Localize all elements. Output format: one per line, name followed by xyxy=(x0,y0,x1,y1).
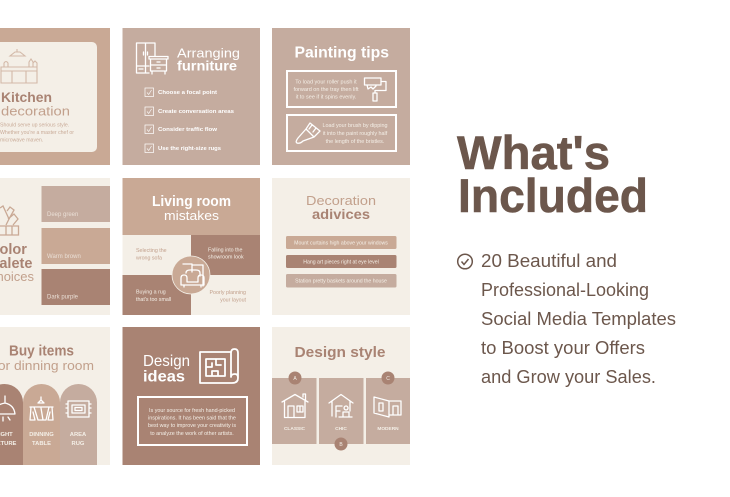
arch: light fixture xyxy=(0,384,23,465)
tip box: brush: Load your brush by dipping xyxy=(322,123,388,129)
heading: Decoration: Decoration xyxy=(306,193,376,208)
advice bar 1: Mount curtains high above your windows xyxy=(294,240,388,246)
advice bar 3: Station pretty baskets around the house xyxy=(295,278,387,284)
text box: design ideas: inspirations. It has been said that the xyxy=(148,416,236,422)
heading: furniture: furniture xyxy=(177,58,238,74)
checklist xyxy=(145,88,234,152)
tip box: roller: forward on the tray then lift xyxy=(293,87,359,93)
icon: wardrobe and nightstand xyxy=(136,43,168,74)
panel: buy items for dinning room xyxy=(0,327,110,465)
title: What's Included: What's xyxy=(457,126,610,179)
swatch: deep green: Deep green xyxy=(47,212,78,218)
panel: color palette choices xyxy=(0,178,110,315)
swatch: warm brown: Warm brown xyxy=(47,254,81,260)
tip box: brush: the length of the bristles. xyxy=(326,139,384,145)
arch: dinning table: DINNING xyxy=(29,432,54,438)
text block: description: to Boost your Offers xyxy=(481,338,645,358)
text box: design ideas: Is your source for fresh hand-picked xyxy=(149,408,235,414)
column: classic xyxy=(272,372,316,444)
arch: dinning table xyxy=(23,384,60,465)
icon: paint roller xyxy=(364,78,386,101)
checklist item 3: Consider traffic flow xyxy=(158,127,218,133)
mistake labels: Poorly planning xyxy=(209,290,246,296)
icon: colour swatch fan xyxy=(0,206,18,235)
heading: decoration: decoration xyxy=(1,104,70,118)
heading: Design style: Design style xyxy=(294,344,386,361)
panel: design style xyxy=(272,327,410,465)
heading: Arranging: Arranging xyxy=(177,46,240,60)
icon: armchair in circle xyxy=(172,256,210,294)
body text: kitchen: Should serve up serious style. xyxy=(0,122,69,128)
text box: design ideas: best way to improve your creativity is xyxy=(148,423,236,429)
arch: area rug: AREA xyxy=(70,432,87,438)
checklist item 1: Choose a focal point xyxy=(158,90,217,96)
swatch: dark purple: Dark purple xyxy=(47,294,79,300)
tip box: brush xyxy=(287,115,396,151)
text block: description: and Grow your Sales. xyxy=(481,367,656,387)
column: classic: A xyxy=(293,376,297,382)
mistake labels: Buying a rug xyxy=(136,290,166,296)
panel: arranging furniture xyxy=(122,28,260,165)
panel: kitchen decoration xyxy=(0,28,110,165)
icon: paint brush xyxy=(296,123,320,143)
panel: living room mistakes xyxy=(122,178,260,315)
checklist item 4: Use the right-size rugs xyxy=(158,146,221,152)
panel: painting tips xyxy=(272,28,410,165)
text box: design ideas: to analyze the work of other artists. xyxy=(150,431,234,437)
body text: kitchen: Whether you're a master chef or xyxy=(0,130,74,136)
heading: Painting tips: Painting tips xyxy=(294,44,389,62)
title: What's Included xyxy=(457,126,648,222)
mistake labels: Selecting the xyxy=(136,248,167,254)
text block: description: Professional-Looking xyxy=(481,280,649,300)
title: What's Included: Included xyxy=(458,169,648,222)
heading: adivices: adivices xyxy=(312,206,370,222)
text block: description: 20 Beautiful and xyxy=(481,251,617,271)
icon: floor plan blueprint xyxy=(200,349,238,383)
tip box: roller xyxy=(287,71,396,107)
icon: kitchen xyxy=(1,49,37,83)
icon: check circle xyxy=(458,254,472,269)
body text: kitchen: microwave maven. xyxy=(0,138,43,144)
panel: decoration advices xyxy=(272,178,410,315)
tip box: roller: it to see if it spins evenly. xyxy=(296,94,357,100)
mistake labels: showroom look xyxy=(208,254,244,260)
column: classic: CLASSIC xyxy=(284,426,306,432)
advice bar 2: Hang art pieces right at eye level xyxy=(303,260,379,266)
arch: area rug: RUG xyxy=(72,441,85,447)
column: modern: MODERN xyxy=(377,426,399,432)
mistake labels: that's too small xyxy=(136,297,171,303)
mistake labels: your layout xyxy=(220,298,247,304)
column: chic: CHIC xyxy=(335,426,347,432)
column: modern xyxy=(366,372,410,444)
heading: Living room: Living room xyxy=(152,194,231,210)
heading: Buy items: Buy items xyxy=(9,344,74,360)
heading: Design: Design xyxy=(143,353,190,370)
tip box: brush: it into the paint roughly half xyxy=(323,131,388,137)
text box: design ideas xyxy=(138,397,247,445)
arch: area rug xyxy=(60,384,97,465)
column: modern: C xyxy=(386,376,390,382)
text block: description xyxy=(481,251,676,387)
checklist item 2: Create conversation areas xyxy=(158,109,234,115)
panel: design ideas xyxy=(122,327,260,465)
mistake labels xyxy=(136,248,247,304)
heading: ideas: ideas xyxy=(143,368,185,386)
tip box: roller: To load your roller push it xyxy=(295,80,357,86)
mistake labels: wrong sofa xyxy=(136,256,162,262)
mistake labels: Falling into the xyxy=(208,248,243,254)
heading: mistakes: mistakes xyxy=(164,208,220,223)
column: chic: B xyxy=(339,442,343,448)
text block: description: Social Media Templates xyxy=(481,309,676,329)
column: chic xyxy=(319,378,364,450)
arch: dinning table: TABLE xyxy=(32,441,51,447)
heading: Kitchen: Kitchen xyxy=(1,89,52,105)
